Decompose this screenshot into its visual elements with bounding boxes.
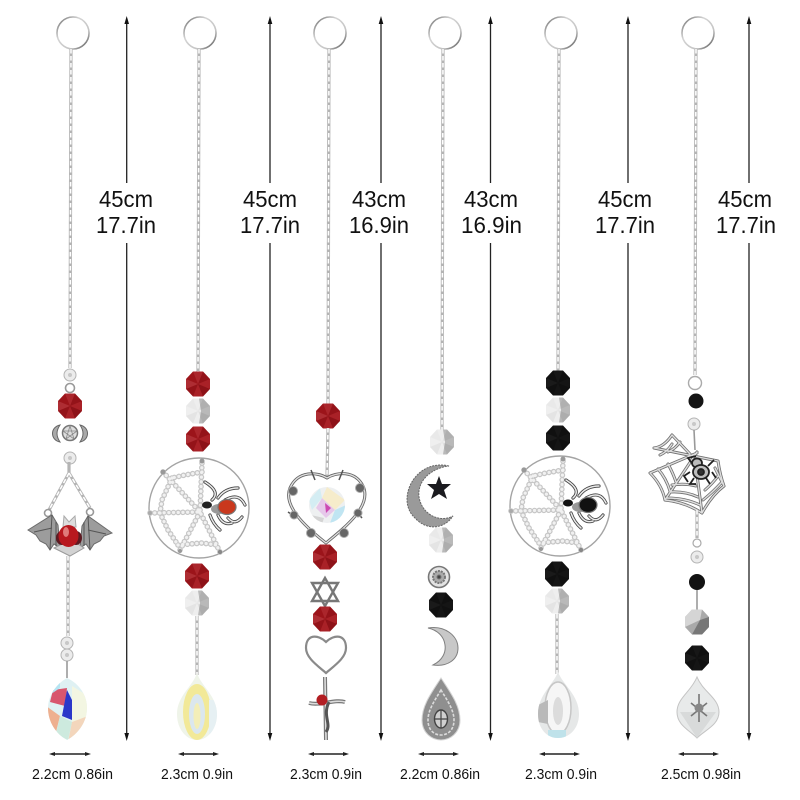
width label 1: 2.2cm 0.86in <box>32 767 113 783</box>
small ring <box>688 376 702 390</box>
black star crystal <box>427 476 451 499</box>
clear bead <box>691 551 703 563</box>
star of David charm <box>312 578 338 606</box>
black octagon <box>545 562 569 586</box>
red octagon crystal <box>58 394 82 418</box>
triangle chains <box>44 462 94 516</box>
length label 5 <box>595 186 655 238</box>
length label 1: 45cm <box>99 186 153 212</box>
chain <box>558 49 559 371</box>
thin heart <box>306 637 346 673</box>
strand 3: barbed heart <box>288 17 365 740</box>
beaded web circle <box>509 456 610 556</box>
red octagon <box>185 564 209 588</box>
triple moon charm <box>52 425 88 442</box>
length label 6 <box>716 186 776 238</box>
chain <box>328 49 329 405</box>
thin crescent <box>428 628 458 665</box>
barbed heart frame <box>288 470 365 543</box>
link <box>66 384 74 392</box>
width label 2: 2.3cm 0.9in <box>161 767 233 783</box>
crescent moon charm <box>407 465 453 527</box>
chain <box>695 49 696 375</box>
AB crystal ball <box>309 487 345 523</box>
clear bead <box>688 418 700 430</box>
lower chain <box>555 614 559 674</box>
length arrow 6 <box>747 16 751 741</box>
length label 6: 17.7in <box>716 212 776 238</box>
clear octagon <box>185 590 209 616</box>
width arrow 3 <box>308 752 349 756</box>
yellow AB teardrop <box>177 674 217 740</box>
red octagon <box>186 426 210 452</box>
length arrow 5 <box>626 16 630 741</box>
width label 4: 2.2cm 0.86in <box>400 767 480 783</box>
width arrow 5 <box>539 752 580 756</box>
length label 2: 17.7in <box>240 212 300 238</box>
chain <box>198 49 199 372</box>
black bead <box>688 394 704 408</box>
ring <box>682 17 714 49</box>
clear octagon <box>546 398 570 422</box>
web teardrop pendant <box>422 678 460 740</box>
bat charm <box>28 515 112 556</box>
strand 4: moon and star <box>407 17 461 740</box>
clear octagon <box>430 430 454 454</box>
ring <box>314 17 346 49</box>
small ring <box>693 539 701 547</box>
length arrow 1 <box>124 16 129 741</box>
length label 1: 17.7in <box>96 212 156 238</box>
red octagon <box>186 372 210 396</box>
spider web charm <box>650 435 724 513</box>
width arrow 2 <box>178 752 219 756</box>
lower chain <box>66 556 70 636</box>
length label 4: 16.9in <box>461 212 522 238</box>
clear octagon <box>429 528 453 552</box>
width arrow 6 <box>678 752 719 756</box>
length arrow 3 <box>379 16 383 741</box>
length arrow 4 <box>488 16 493 741</box>
strand 6: web charm <box>650 17 724 738</box>
ring <box>57 17 89 49</box>
black octagon <box>546 426 570 450</box>
length label 4: 43cm <box>464 186 518 212</box>
length label 2: 45cm <box>243 186 297 212</box>
red octagon <box>313 606 337 632</box>
chain <box>442 49 443 430</box>
black bead <box>689 574 705 590</box>
width arrow 1 <box>49 752 91 756</box>
beaded web circle <box>148 458 249 558</box>
length label 6: 45cm <box>718 186 772 212</box>
filigree charm <box>428 566 450 588</box>
clear octagon <box>186 398 210 424</box>
length label 3: 16.9in <box>349 212 409 238</box>
ring <box>545 17 577 49</box>
grey octagon <box>685 610 709 634</box>
length label 1 <box>96 186 156 238</box>
strand 2: red spider web <box>148 17 249 742</box>
length label 5: 45cm <box>598 186 652 212</box>
length arrow 2 <box>268 16 272 741</box>
twin beads <box>61 637 73 678</box>
strand 1: bat pendant <box>28 17 112 742</box>
strand 5: black spider web <box>509 17 610 740</box>
black octagon <box>685 646 709 670</box>
red octagon <box>316 404 340 428</box>
chain to heart <box>327 428 328 476</box>
spider <box>563 480 606 528</box>
red octagon <box>313 544 337 570</box>
chain <box>70 49 71 368</box>
spider charm <box>684 456 716 484</box>
leaf crystal with spider <box>677 677 719 738</box>
width arrow 4 <box>418 752 459 756</box>
length label 4 <box>461 186 522 238</box>
link <box>696 590 698 610</box>
lower chain <box>695 510 699 538</box>
ring <box>429 17 461 49</box>
cross with rose <box>309 677 345 740</box>
small bead <box>64 452 76 464</box>
length label 3 <box>349 186 409 238</box>
width label 5: 2.3cm 0.9in <box>525 767 597 783</box>
clear octagon <box>545 588 569 614</box>
width label 6: 2.5cm 0.98in <box>661 767 741 783</box>
spider <box>202 482 245 530</box>
AB marquise crystal <box>48 678 87 740</box>
length label 3: 43cm <box>352 186 406 212</box>
link above web <box>694 430 695 450</box>
clear teardrop crystal <box>538 672 579 738</box>
lower chain <box>195 616 199 675</box>
small crystal bead <box>64 369 76 381</box>
black octagon <box>546 370 570 396</box>
length label 2 <box>240 186 300 238</box>
ring <box>184 17 216 49</box>
length label 5: 17.7in <box>595 212 655 238</box>
width label 3: 2.3cm 0.9in <box>290 767 362 783</box>
black octagon <box>429 592 453 618</box>
